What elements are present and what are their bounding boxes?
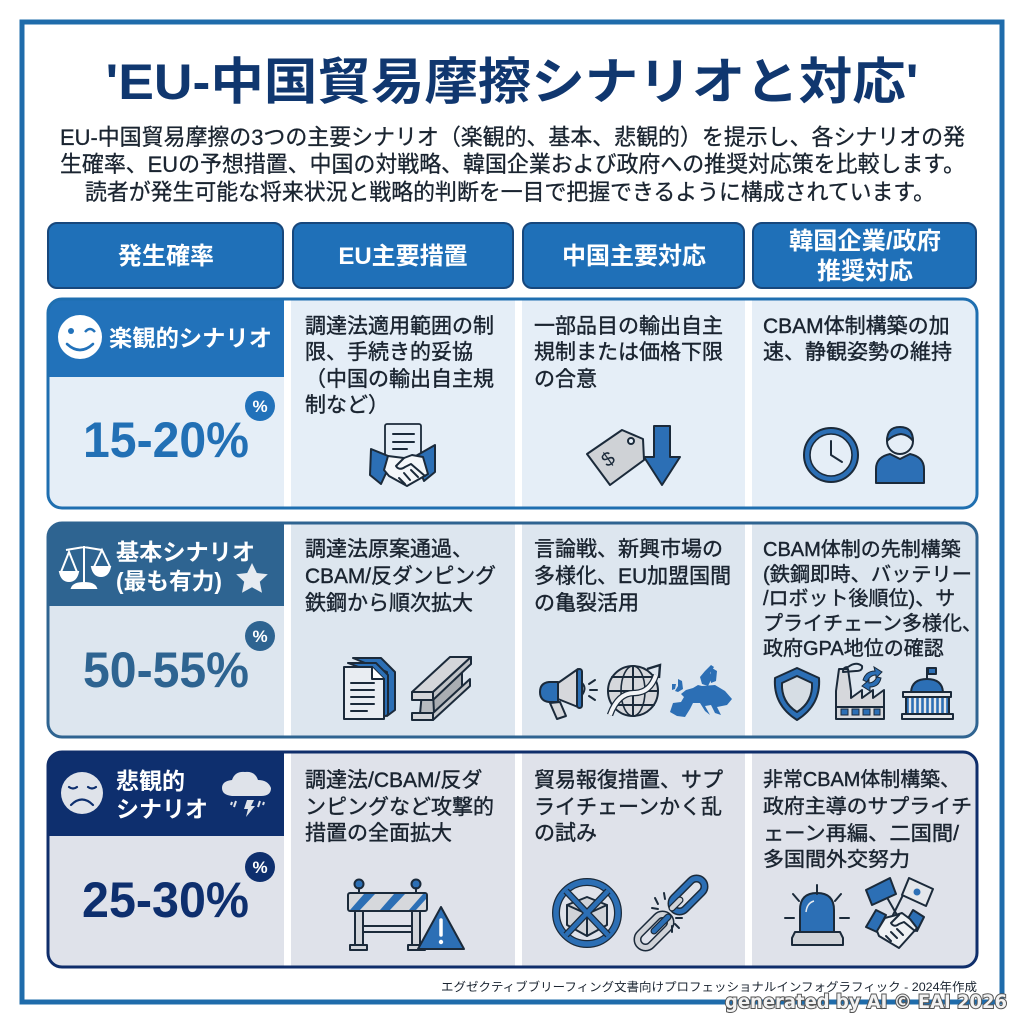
China response text bbox=[534, 538, 731, 615]
Korea response text: 政府主導のサプライチ bbox=[763, 795, 972, 818]
scenario name bbox=[116, 768, 208, 822]
Korea response text: 政府GPA地位の確認 bbox=[763, 637, 944, 660]
header: Korea response: 推奨対応 bbox=[817, 258, 913, 285]
Korea response text bbox=[763, 768, 972, 871]
China response text: 規制または価格下限 bbox=[534, 341, 723, 364]
EU measure text bbox=[305, 769, 494, 845]
EU measure text bbox=[305, 315, 494, 417]
China response text: ライチェーンかく乱 bbox=[534, 796, 722, 819]
scenario name: 楽観的シナリオ bbox=[109, 325, 272, 351]
icon: flags and handshake bbox=[866, 878, 933, 948]
header: China response bbox=[523, 223, 744, 288]
percent badge: % bbox=[252, 397, 268, 416]
icon: alarm light bbox=[785, 885, 849, 945]
China response text bbox=[534, 315, 723, 391]
percent badge bbox=[245, 852, 275, 882]
Korea response text: (鉄鋼即時、バッテリー bbox=[763, 563, 972, 586]
icon: star bbox=[236, 563, 268, 593]
EU measure text: CBAM/反ダンピング bbox=[305, 565, 496, 588]
intro text: 生確率、EUの予想措置、中国の対戦略、韓国企業および政府への推奨対応策を比較します。 bbox=[60, 152, 965, 177]
intro text: EU-中国貿易摩擦の3つの主要シナリオ（楽観的、基本、悲観的）を提示し、各シナリオの発 bbox=[60, 125, 965, 150]
panel: optimistic scenario bbox=[48, 299, 977, 508]
probability value: 15-20% bbox=[83, 412, 249, 468]
probability value: 50-55% bbox=[83, 642, 249, 698]
China response text: 一部品目の輸出自主 bbox=[534, 315, 723, 338]
title: 'EU-中国貿易摩擦シナリオと対応' bbox=[106, 54, 919, 110]
icon: documents bbox=[344, 658, 395, 719]
EU measure text bbox=[305, 538, 496, 615]
intro text: 読者が発生可能な将来状況と戦略的判断を一目で把握できるように構成されています。 bbox=[85, 180, 935, 205]
icon: person bbox=[876, 427, 924, 483]
intro text bbox=[60, 125, 965, 205]
EU measure text: 限、手続き的妥協 bbox=[305, 341, 473, 364]
China response text: 多様化、EU加盟国間 bbox=[534, 565, 731, 588]
probability value: 25-30% bbox=[82, 872, 249, 928]
Korea response text: ェーン再編、二国間/ bbox=[763, 822, 959, 845]
scenario name: (最も有力) bbox=[116, 568, 222, 594]
icon: warning triangle bbox=[418, 907, 464, 949]
EU measure text: 鉄鋼から順次拡大 bbox=[305, 592, 473, 615]
EU measure text: 制など） bbox=[305, 394, 389, 417]
scenario name: シナリオ bbox=[116, 796, 208, 822]
icon: barrier bbox=[348, 880, 427, 950]
percent badge: % bbox=[252, 858, 268, 877]
icon: storm cloud bbox=[222, 772, 271, 817]
Korea response text: CBAM体制構築の加 bbox=[763, 315, 950, 338]
watermark: generated by AI © EAI 2026 bbox=[725, 992, 1007, 1013]
icon: price tag and down arrow bbox=[587, 426, 680, 485]
header: EU measures: EU主要措置 bbox=[338, 243, 468, 270]
China response text: 貿易報復措置、サプ bbox=[534, 769, 723, 792]
Korea response text: CBAM体制の先制構築 bbox=[763, 538, 961, 561]
Korea response text: 速、静観姿勢の維持 bbox=[763, 341, 952, 364]
Korea response text: /ロボット後順位)、サ bbox=[763, 587, 955, 610]
icon: clock bbox=[804, 428, 858, 482]
EU measure text: 調達法適用範囲の制 bbox=[305, 315, 494, 338]
China response text: 言論戦、新興市場の bbox=[534, 538, 723, 561]
icon: government building bbox=[902, 668, 953, 719]
column headers bbox=[48, 223, 976, 288]
percent badge: % bbox=[252, 627, 268, 646]
China response text bbox=[534, 769, 723, 845]
panel: pessimistic scenario bbox=[48, 752, 977, 967]
icon: megaphone bbox=[540, 669, 597, 719]
scenario name bbox=[116, 539, 255, 594]
scenario name: 悲観的 bbox=[116, 768, 185, 794]
icon: map of Europe bbox=[670, 665, 732, 717]
EU measure text: 調達法/CBAM/反ダ bbox=[305, 769, 482, 792]
header: EU measures bbox=[293, 223, 513, 288]
panel: base scenario bbox=[48, 523, 982, 737]
Korea response text: 多国間外交努力 bbox=[763, 848, 910, 871]
header: Korea response bbox=[753, 223, 976, 288]
icon: scales bbox=[60, 546, 110, 588]
EU measure text: 措置の全面拡大 bbox=[305, 822, 452, 845]
percent badge bbox=[245, 391, 275, 421]
header: Korea response: 韓国企業/政府 bbox=[789, 228, 941, 255]
icon: smiling face bbox=[58, 315, 102, 359]
icon: shield bbox=[775, 668, 819, 720]
EU measure text: ンピングなど攻撃的 bbox=[305, 796, 494, 819]
scenario name: 基本シナリオ bbox=[116, 539, 255, 565]
icon: prohibited box bbox=[556, 882, 618, 944]
icon: globe with arrow bbox=[608, 665, 660, 716]
China response text: の試み bbox=[534, 822, 597, 845]
icon: steel beam bbox=[412, 657, 471, 720]
EU measure text: 調達法原案通過、 bbox=[305, 538, 473, 561]
icon: factory bbox=[836, 664, 884, 719]
Korea response text: 非常CBAM体制構築、 bbox=[763, 768, 960, 791]
icon: sad face bbox=[61, 772, 103, 814]
header: probability: 発生確率 bbox=[118, 243, 214, 270]
footer note: エグゼクティブブリーフィング文書向けプロフェッショナルインフォグラフィック - 2024年作成 bbox=[441, 979, 977, 994]
Korea response text bbox=[763, 315, 952, 364]
China response text: の亀裂活用 bbox=[534, 592, 639, 615]
header: China response: 中国主要対応 bbox=[562, 243, 706, 270]
EU measure text: （中国の輸出自主規 bbox=[305, 368, 494, 391]
China response text: の合意 bbox=[534, 368, 597, 391]
icon: price tag and down arrow: $ bbox=[597, 448, 619, 472]
header: probability bbox=[48, 223, 283, 288]
icon: broken chain bbox=[634, 875, 708, 951]
icon: handshake and document bbox=[370, 424, 435, 486]
Korea response text bbox=[763, 538, 982, 660]
percent badge bbox=[245, 621, 275, 651]
Korea response text: プライチェーン多様化、 bbox=[763, 612, 982, 635]
